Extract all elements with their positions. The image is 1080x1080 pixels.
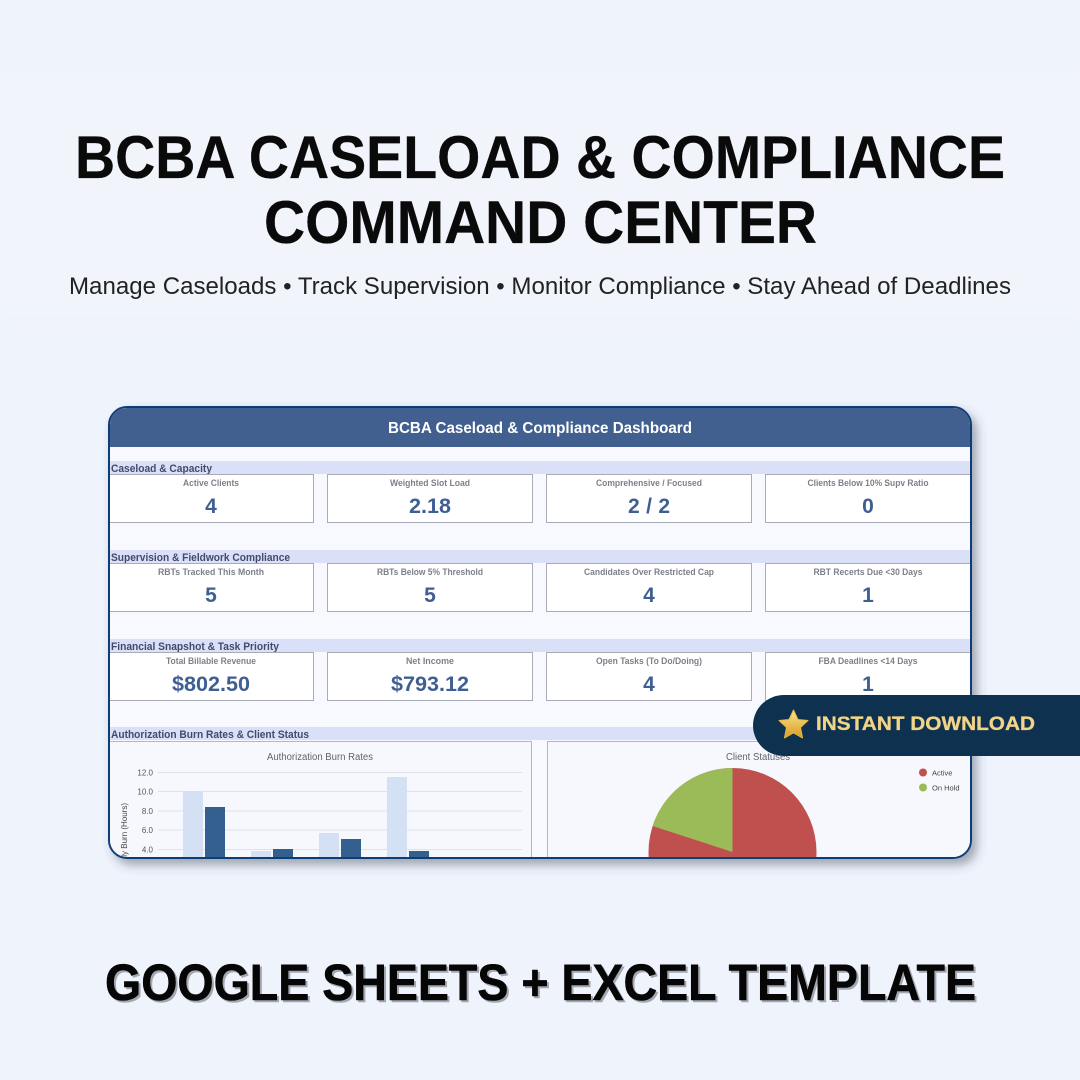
kpi: clients below ratio: 0 (862, 495, 874, 518)
section: supervision and fieldwork compliance (104, 550, 976, 612)
title area glow (0, 80, 1080, 310)
kpi: rbt recerts (766, 564, 976, 612)
section band: authorization burn rates and client status: Authorization Burn Rates & Client Status (111, 729, 309, 741)
kpi: candidates over cap: 4 (643, 584, 655, 607)
kpi: rbt recerts: RBT Recerts Due <30 Days (814, 566, 922, 577)
kpi: fba deadlines (766, 652, 976, 700)
panel: dashboard card (106, 406, 984, 872)
section band: authorization burn rates and client status (110, 727, 756, 740)
kpi: active clients: 4 (205, 495, 217, 518)
section: financial snapshot and task priority (104, 639, 976, 700)
bar chart: authorization burn rates (110, 741, 532, 857)
section: caseload and capacity (104, 461, 976, 522)
pie chart: client statuses (547, 741, 970, 857)
legend (919, 768, 960, 792)
kpi: open tasks (546, 652, 752, 700)
kpi: rbts tracked: 5 (205, 584, 217, 607)
kpi: rbts tracked: RBTs Tracked This Month (158, 566, 264, 577)
badge: instant download: INSTANT DOWNLOAD (816, 714, 1035, 735)
kpi: total billable revenue: $802.50 (172, 673, 250, 696)
kpi: net income: Net Income (406, 655, 454, 666)
bar chart: authorization burn rates: 4.0 (142, 846, 154, 854)
kpi: comprehensive focused (546, 474, 752, 522)
kpi: candidates over cap (546, 564, 752, 612)
section: supervision and fieldwork compliance: Supervision & Fieldwork Compliance (111, 552, 290, 564)
kpi: comprehensive focused: 2 / 2 (628, 495, 670, 518)
bar chart: authorization burn rates: 12.0 (137, 768, 154, 778)
kpi: comprehensive focused: Comprehensive / Focused (596, 477, 702, 488)
kpi: active clients: Active Clients (183, 477, 239, 488)
badge: instant download (753, 695, 1080, 756)
kpi: clients below ratio: Clients Below 10% Supv Ratio (808, 477, 929, 488)
dashboard header bar (110, 408, 970, 447)
kpi: fba deadlines: 1 (862, 673, 874, 696)
bar chart: authorization burn rates: 8.0 (142, 807, 154, 816)
bar chart: authorization burn rates: 6.0 (142, 826, 154, 835)
dashboard header title: BCBA Caseload & Compliance Dashboard (388, 420, 692, 437)
kpi: total billable revenue (104, 652, 314, 700)
kpi: weighted slot load (328, 474, 532, 522)
kpi: fba deadlines: FBA Deadlines <14 Days (818, 655, 918, 666)
kpi: rbts below threshold: RBTs Below 5% Threshold (377, 566, 483, 577)
title: COMMAND CENTER (264, 189, 817, 256)
kpi: rbt recerts: 1 (862, 584, 874, 607)
kpi: rbts below threshold (328, 564, 532, 612)
kpi: total billable revenue: Total Billable Revenue (166, 655, 256, 666)
kpi: weighted slot load: 2.18 (409, 495, 451, 518)
title: BCBA CASELOAD & COMPLIANCE (75, 124, 1005, 191)
section: caseload and capacity: Caseload & Capacity (111, 463, 213, 475)
kpi: rbts below threshold: 5 (424, 584, 436, 607)
kpi: open tasks: 4 (643, 673, 655, 696)
subtitle: Manage Caseloads • Track Supervision • Monitor Compliance • Stay Ahead of Deadlines (69, 273, 1011, 300)
footer heading: GOOGLE SHEETS + EXCEL TEMPLATE (105, 954, 976, 1011)
legend: Active (932, 768, 952, 778)
legend: On Hold (932, 784, 960, 792)
kpi: net income (328, 652, 532, 700)
kpi: clients below ratio (766, 474, 976, 522)
bar chart: authorization burn rates: Weekly Burn (Hours) (120, 803, 129, 877)
bar chart: authorization burn rates: Authorization Burn Rates (267, 752, 373, 763)
kpi: active clients (104, 474, 314, 522)
footer heading: GOOGLE SHEETS + EXCEL TEMPLATE (107, 956, 978, 1013)
title (75, 124, 1005, 256)
icon: star (779, 710, 808, 738)
kpi: weighted slot load: Weighted Slot Load (390, 477, 470, 488)
section: financial snapshot and task priority: Financial Snapshot & Task Priority (111, 641, 280, 653)
bar chart: authorization burn rates: 10.0 (137, 788, 154, 796)
pie chart: client statuses: Client Statuses (726, 752, 790, 763)
kpi: net income: $793.12 (391, 673, 469, 696)
kpi: rbts tracked (104, 564, 314, 612)
kpi: candidates over cap: Candidates Over Restricted Cap (584, 566, 714, 577)
kpi: open tasks: Open Tasks (To Do/Doing) (596, 655, 702, 666)
